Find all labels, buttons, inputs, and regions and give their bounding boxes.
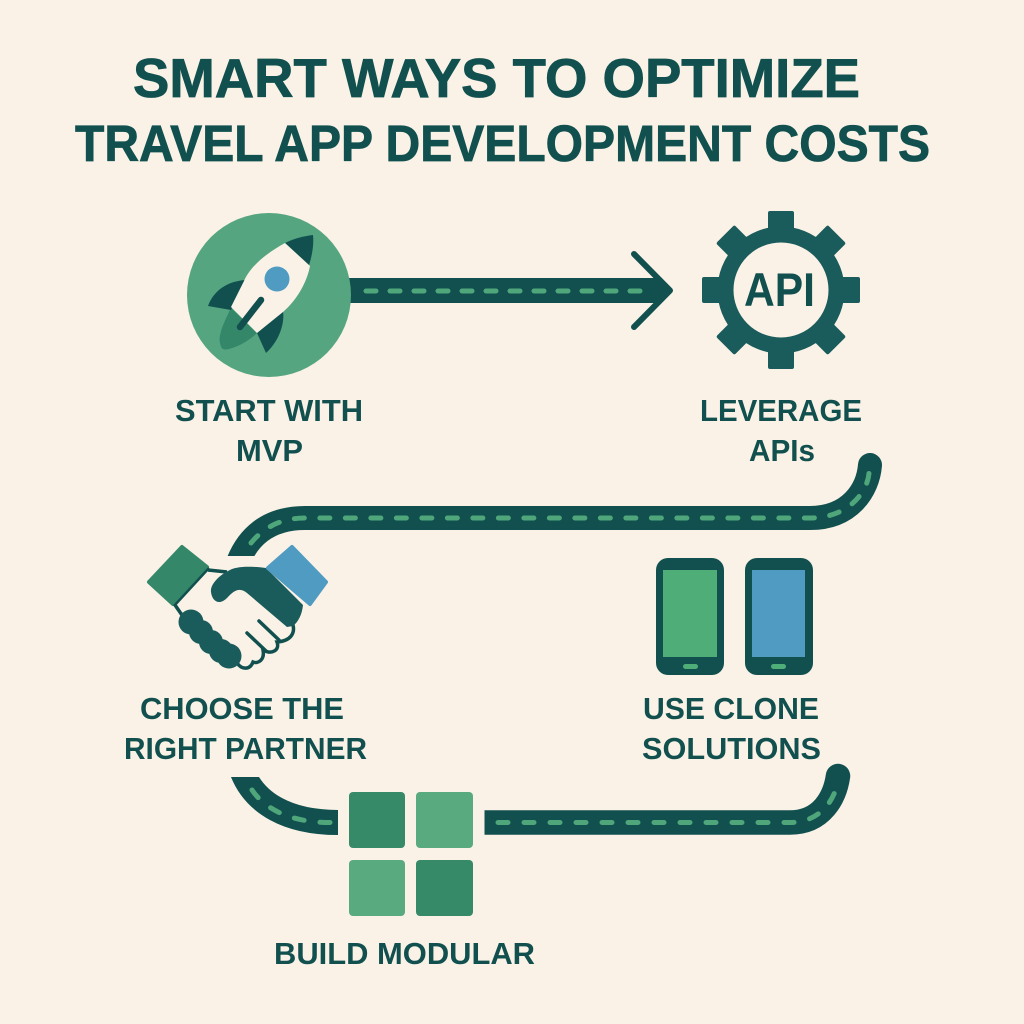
title: TRAVEL APP DEVELOPMENT COSTS bbox=[75, 115, 930, 172]
title bbox=[75, 47, 930, 172]
icon: handshake bbox=[149, 547, 326, 668]
label: leverage APIs: APIs bbox=[749, 433, 815, 468]
road: APIs to partner bbox=[236, 465, 870, 568]
label: start with MVP: MVP bbox=[236, 433, 303, 468]
arrow: MVP to APIs bbox=[345, 254, 672, 327]
label: choose the right partner bbox=[124, 691, 367, 766]
label: start with MVP: START WITH bbox=[175, 393, 363, 428]
label: use clone solutions: SOLUTIONS bbox=[642, 731, 821, 766]
icon: rocket in circle bbox=[187, 213, 351, 377]
label: leverage APIs: LEVERAGE bbox=[700, 393, 862, 428]
icon: two phones bbox=[656, 558, 813, 675]
icon: API gear: API bbox=[744, 263, 815, 316]
label: use clone solutions: USE CLONE bbox=[643, 691, 819, 726]
label: choose the right partner: RIGHT PARTNER bbox=[124, 731, 367, 766]
label: leverage APIs bbox=[700, 393, 862, 468]
road: clone solutions to modular bbox=[472, 776, 838, 838]
label: choose the right partner: CHOOSE THE bbox=[140, 691, 344, 726]
road: modular to partner bbox=[240, 765, 338, 822]
label: start with MVP bbox=[175, 393, 363, 468]
label: use clone solutions bbox=[642, 691, 821, 766]
title: SMART WAYS TO OPTIMIZE bbox=[133, 47, 860, 109]
label: build modular: BUILD MODULAR bbox=[274, 936, 535, 971]
icon: API gear bbox=[704, 213, 858, 367]
icon: modular blocks bbox=[349, 792, 473, 916]
